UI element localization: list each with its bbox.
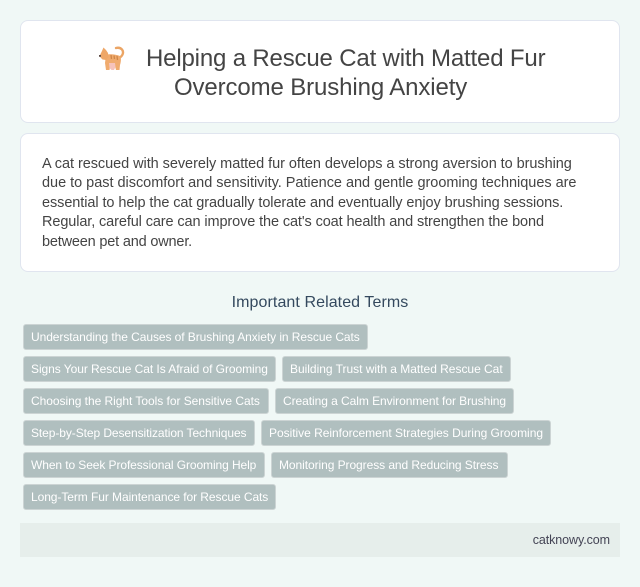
tag: Choosing the Right Tools for Sensitive Cats <box>31 394 260 408</box>
tag <box>23 452 265 478</box>
description text: essential to help the cat gradually tolerate and eventually enjoy brushing sessions. <box>42 195 563 211</box>
footer source: catknowy.com <box>533 533 610 547</box>
tag <box>271 452 508 478</box>
tag <box>261 420 551 446</box>
description text: due to past discomfort and sensitivity. Patience and gentle grooming techniques are <box>42 175 576 191</box>
footer bar <box>20 523 620 557</box>
description text: Regular, careful care can improve the cat's coat health and strengthen the bond <box>42 214 544 230</box>
tag list <box>23 324 551 510</box>
tag: Signs Your Rescue Cat Is Afraid of Grooming <box>31 362 268 376</box>
panel: description card <box>20 133 620 272</box>
tag: Building Trust with a Matted Rescue Cat <box>290 362 503 376</box>
description text: between pet and owner. <box>42 234 192 250</box>
tag: Step-by-Step Desensitization Techniques <box>31 426 246 440</box>
tag <box>23 388 269 414</box>
tag: When to Seek Professional Grooming Help <box>31 458 256 472</box>
tag: Positive Reinforcement Strategies During Grooming <box>269 426 543 440</box>
description text: A cat rescued with severely matted fur often develops a strong aversion to brushing <box>42 156 572 172</box>
tag: Understanding the Causes of Brushing Anxiety in Rescue Cats <box>31 330 360 344</box>
tag: Creating a Calm Environment for Brushing <box>283 394 506 408</box>
tag <box>23 324 368 350</box>
panel: title card <box>20 20 620 123</box>
heading: important related terms: Important Related Terms <box>232 294 408 311</box>
description text <box>42 156 576 250</box>
tag <box>23 484 276 510</box>
tag: Monitoring Progress and Reducing Stress <box>279 458 498 472</box>
title line 1: Helping a Rescue Cat with Matted Fur <box>146 45 545 72</box>
tag: Long-Term Fur Maintenance for Rescue Cats <box>31 490 268 504</box>
tag <box>275 388 514 414</box>
icon: cat <box>99 46 124 70</box>
title line 2: Overcome Brushing Anxiety <box>174 74 467 101</box>
tag <box>23 420 255 446</box>
tag <box>282 356 511 382</box>
tag <box>23 356 276 382</box>
